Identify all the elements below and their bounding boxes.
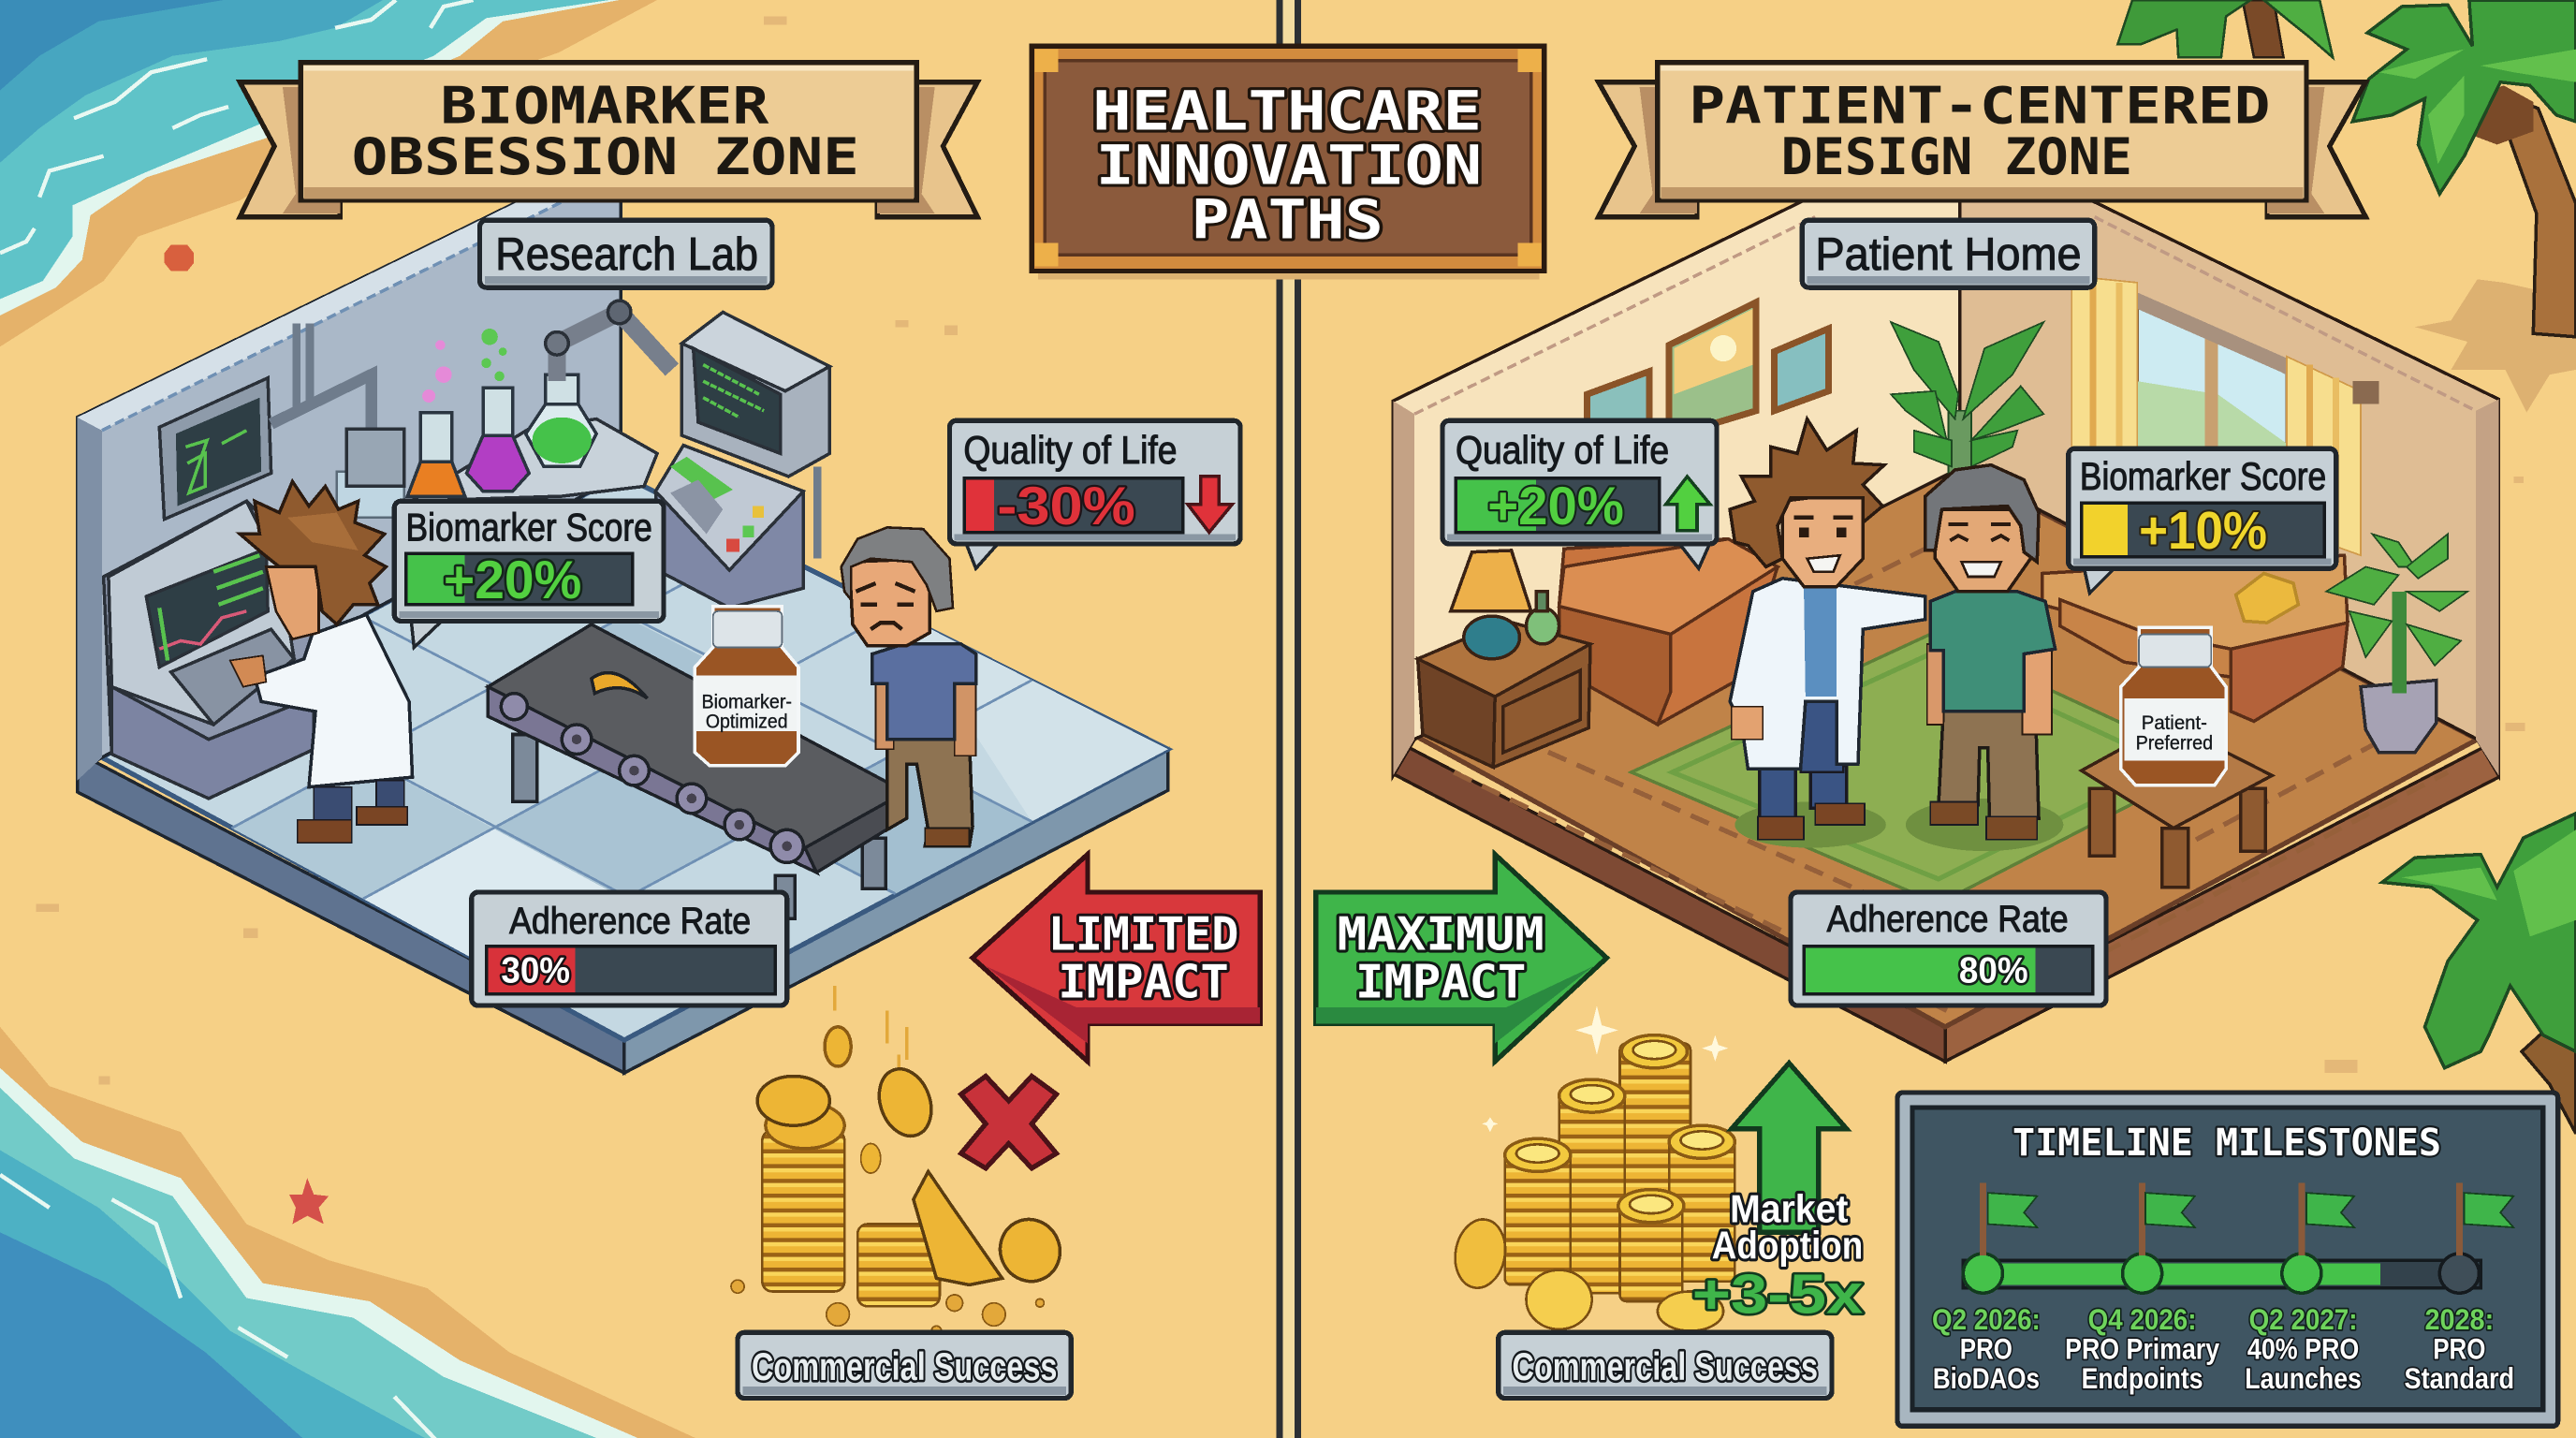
- down arrow: [1188, 477, 1232, 533]
- sparkles: [1482, 1005, 1728, 1132]
- label: commercial success right: Commercial Success: [1513, 1344, 1818, 1388]
- scientist at console: [230, 481, 413, 843]
- banner: patient-centered design zone: [1599, 63, 2365, 217]
- panel: timeline milestones: TIMELINE MILESTONES: [2012, 1121, 2441, 1165]
- bubbles: [422, 329, 506, 403]
- home walls: [1393, 131, 2498, 775]
- milestone: q2 2026: PRO: [1960, 1331, 2012, 1365]
- arrow: limited impact: IMPACT: [1058, 954, 1229, 1008]
- tall plant: [1891, 322, 2043, 473]
- milestone: q2 2027: [2245, 1302, 2362, 1395]
- gauge: biomarker score +10%: [2069, 448, 2336, 594]
- flask: orange: [407, 413, 465, 496]
- milestone: 2028: PRO: [2433, 1331, 2485, 1365]
- coins: growing stacks: [1450, 1035, 1734, 1331]
- palm tree shadow: [2415, 279, 2576, 413]
- flask: purple: [466, 388, 529, 492]
- label: patient home: Patient Home: [1815, 229, 2082, 280]
- palm tree: bottom right: [2382, 814, 2576, 1134]
- milestone: q4 2026: Q4 2026:: [2088, 1302, 2197, 1336]
- milestone: 2028: [2405, 1302, 2514, 1395]
- potted plant: [2326, 534, 2467, 753]
- palm tree: top right: [2352, 0, 2576, 337]
- home platform base: [1393, 740, 2498, 1062]
- gauge: quality of life -30%: -30%: [997, 477, 1135, 536]
- market adoption arrow and text: +3-5x: [1692, 1262, 1863, 1325]
- gauge: quality of life -30%: Quality of Life: [963, 429, 1178, 472]
- title plaque: INNOVATION: [1096, 134, 1482, 198]
- label: research lab: Research Lab: [495, 229, 758, 280]
- conveyor belt: [488, 624, 905, 918]
- palm tree: top centre: [2117, 0, 2333, 57]
- gauge: biomarker score +20%: [394, 501, 664, 647]
- milestone: q2 2027: Launches: [2245, 1361, 2362, 1395]
- label: commercial success left: Commercial Success: [752, 1344, 1057, 1388]
- wall pictures: [1587, 302, 1828, 457]
- flask: green: [526, 374, 596, 466]
- gauge: quality of life +20%: +20%: [1487, 477, 1624, 536]
- wall monitor: [159, 378, 271, 520]
- milestone: q2 2027: Q2 2027:: [2249, 1302, 2358, 1336]
- lab pipes: [271, 374, 372, 431]
- milestone: q4 2026: PRO Primary: [2065, 1331, 2219, 1365]
- milestone: 2028: Standard: [2405, 1361, 2514, 1395]
- gauge: adherence rate 30%: Adherence Rate: [509, 901, 751, 942]
- gauge: adherence rate 30%: 30%: [501, 951, 570, 991]
- banner: patient-centered design zone: PATIENT-CENTERED: [1689, 77, 2271, 136]
- gauge: adherence rate 30%: [472, 892, 787, 1005]
- milestone track: [1963, 1254, 2481, 1293]
- window with curtains: [2071, 276, 2378, 555]
- valve apparatus: [337, 429, 404, 518]
- bottle: biomarker-optimized: Biomarker-: [701, 691, 792, 712]
- milestone flags: [1980, 1183, 2513, 1255]
- bottle: biomarker-optimized: [695, 607, 798, 766]
- up arrow: [1666, 477, 1710, 531]
- lab back wall: [78, 151, 621, 781]
- bottle: patient-preferred: [2121, 627, 2226, 785]
- arrow: limited impact: [973, 855, 1260, 1062]
- gauge: quality of life -30%: [949, 420, 1240, 568]
- milestone: q4 2026: Endpoints: [2082, 1361, 2203, 1395]
- milestone: q4 2026: [2065, 1302, 2219, 1395]
- wall seam highlights: [1414, 217, 2476, 414]
- bottle: patient-preferred: Preferred: [2136, 732, 2213, 754]
- banner: patient-centered design zone: DESIGN ZONE: [1781, 127, 2132, 186]
- market adoption arrow and text: Adoption: [1712, 1223, 1863, 1267]
- panel: patient home isometric room: [1393, 131, 2498, 1062]
- panel: timeline milestones: [1897, 1093, 2558, 1426]
- arrow: maximum impact: [1316, 855, 1606, 1062]
- lab monitor right: [681, 312, 829, 559]
- bottle: patient-preferred: Patient-: [2142, 712, 2207, 734]
- milestone: q2 2026: Q2 2026:: [1932, 1302, 2041, 1336]
- gauge: biomarker score +10%: +10%: [2139, 501, 2267, 560]
- arrow: limited impact: LIMITED: [1048, 906, 1238, 961]
- centre divider: [1277, 0, 1301, 1438]
- robot arm: [546, 301, 672, 381]
- gauge: biomarker score +10%: Biomarker Score: [2080, 455, 2326, 498]
- gauge: adherence rate 80%: Adherence Rate: [1827, 899, 2069, 940]
- milestone: 2028: 2028:: [2424, 1302, 2494, 1336]
- milestone: q2 2026: BioDAOs: [1933, 1361, 2040, 1395]
- label: commercial success left: [738, 1332, 1071, 1399]
- arrow: maximum impact: MAXIMUM: [1338, 906, 1544, 961]
- bottle: biomarker-optimized: Optimized: [706, 711, 788, 732]
- small table: [2082, 723, 2272, 888]
- milestone: q2 2026: [1932, 1302, 2041, 1395]
- happy patient: [1925, 465, 2056, 840]
- gauge: adherence rate 80%: [1791, 892, 2106, 1005]
- market adoption arrow and text: [1692, 1064, 1863, 1325]
- lab platform base: [78, 749, 1168, 1073]
- right sofa: [2042, 555, 2348, 721]
- label: commercial success right: [1499, 1332, 1832, 1399]
- control panel: [655, 446, 803, 608]
- side table with lamp: [1418, 550, 1590, 768]
- doctor: [1730, 419, 1925, 840]
- title plaque: [1032, 46, 1544, 279]
- console with screens: [104, 501, 314, 799]
- gauge: biomarker score +20%: +20%: [444, 550, 581, 610]
- arrow: maximum impact: IMPACT: [1355, 954, 1526, 1008]
- coins: limited pile: [731, 986, 1070, 1336]
- title plaque: PATHS: [1191, 187, 1383, 251]
- title plaque: HEALTHCARE: [1092, 80, 1482, 143]
- ocean: bottom left: [0, 1027, 698, 1438]
- gauge: quality of life +20%: [1442, 420, 1717, 568]
- market adoption arrow and text: Market: [1730, 1187, 1848, 1231]
- label: research lab: [480, 220, 772, 287]
- left sofa: [1559, 539, 1778, 725]
- ocean: top left: [0, 0, 657, 346]
- lab floor: [102, 475, 1168, 1040]
- icon: red x: [961, 1077, 1057, 1168]
- banner: biomarker obsession zone: OBSESSION ZONE: [352, 127, 859, 186]
- banner: biomarker obsession zone: BIOMARKER: [440, 77, 769, 136]
- home floor: [1412, 468, 2478, 1027]
- lab counter: [411, 419, 657, 501]
- milestone: q2 2027: 40% PRO: [2247, 1331, 2359, 1365]
- sad patient: [842, 527, 976, 846]
- gauge: adherence rate 80%: 80%: [1959, 951, 2028, 991]
- gauge: biomarker score +20%: Biomarker Score: [406, 506, 652, 549]
- banner: biomarker obsession zone: [240, 63, 977, 217]
- gauge: quality of life +20%: Quality of Life: [1456, 429, 1669, 472]
- panel: research lab isometric room: [78, 151, 1168, 1073]
